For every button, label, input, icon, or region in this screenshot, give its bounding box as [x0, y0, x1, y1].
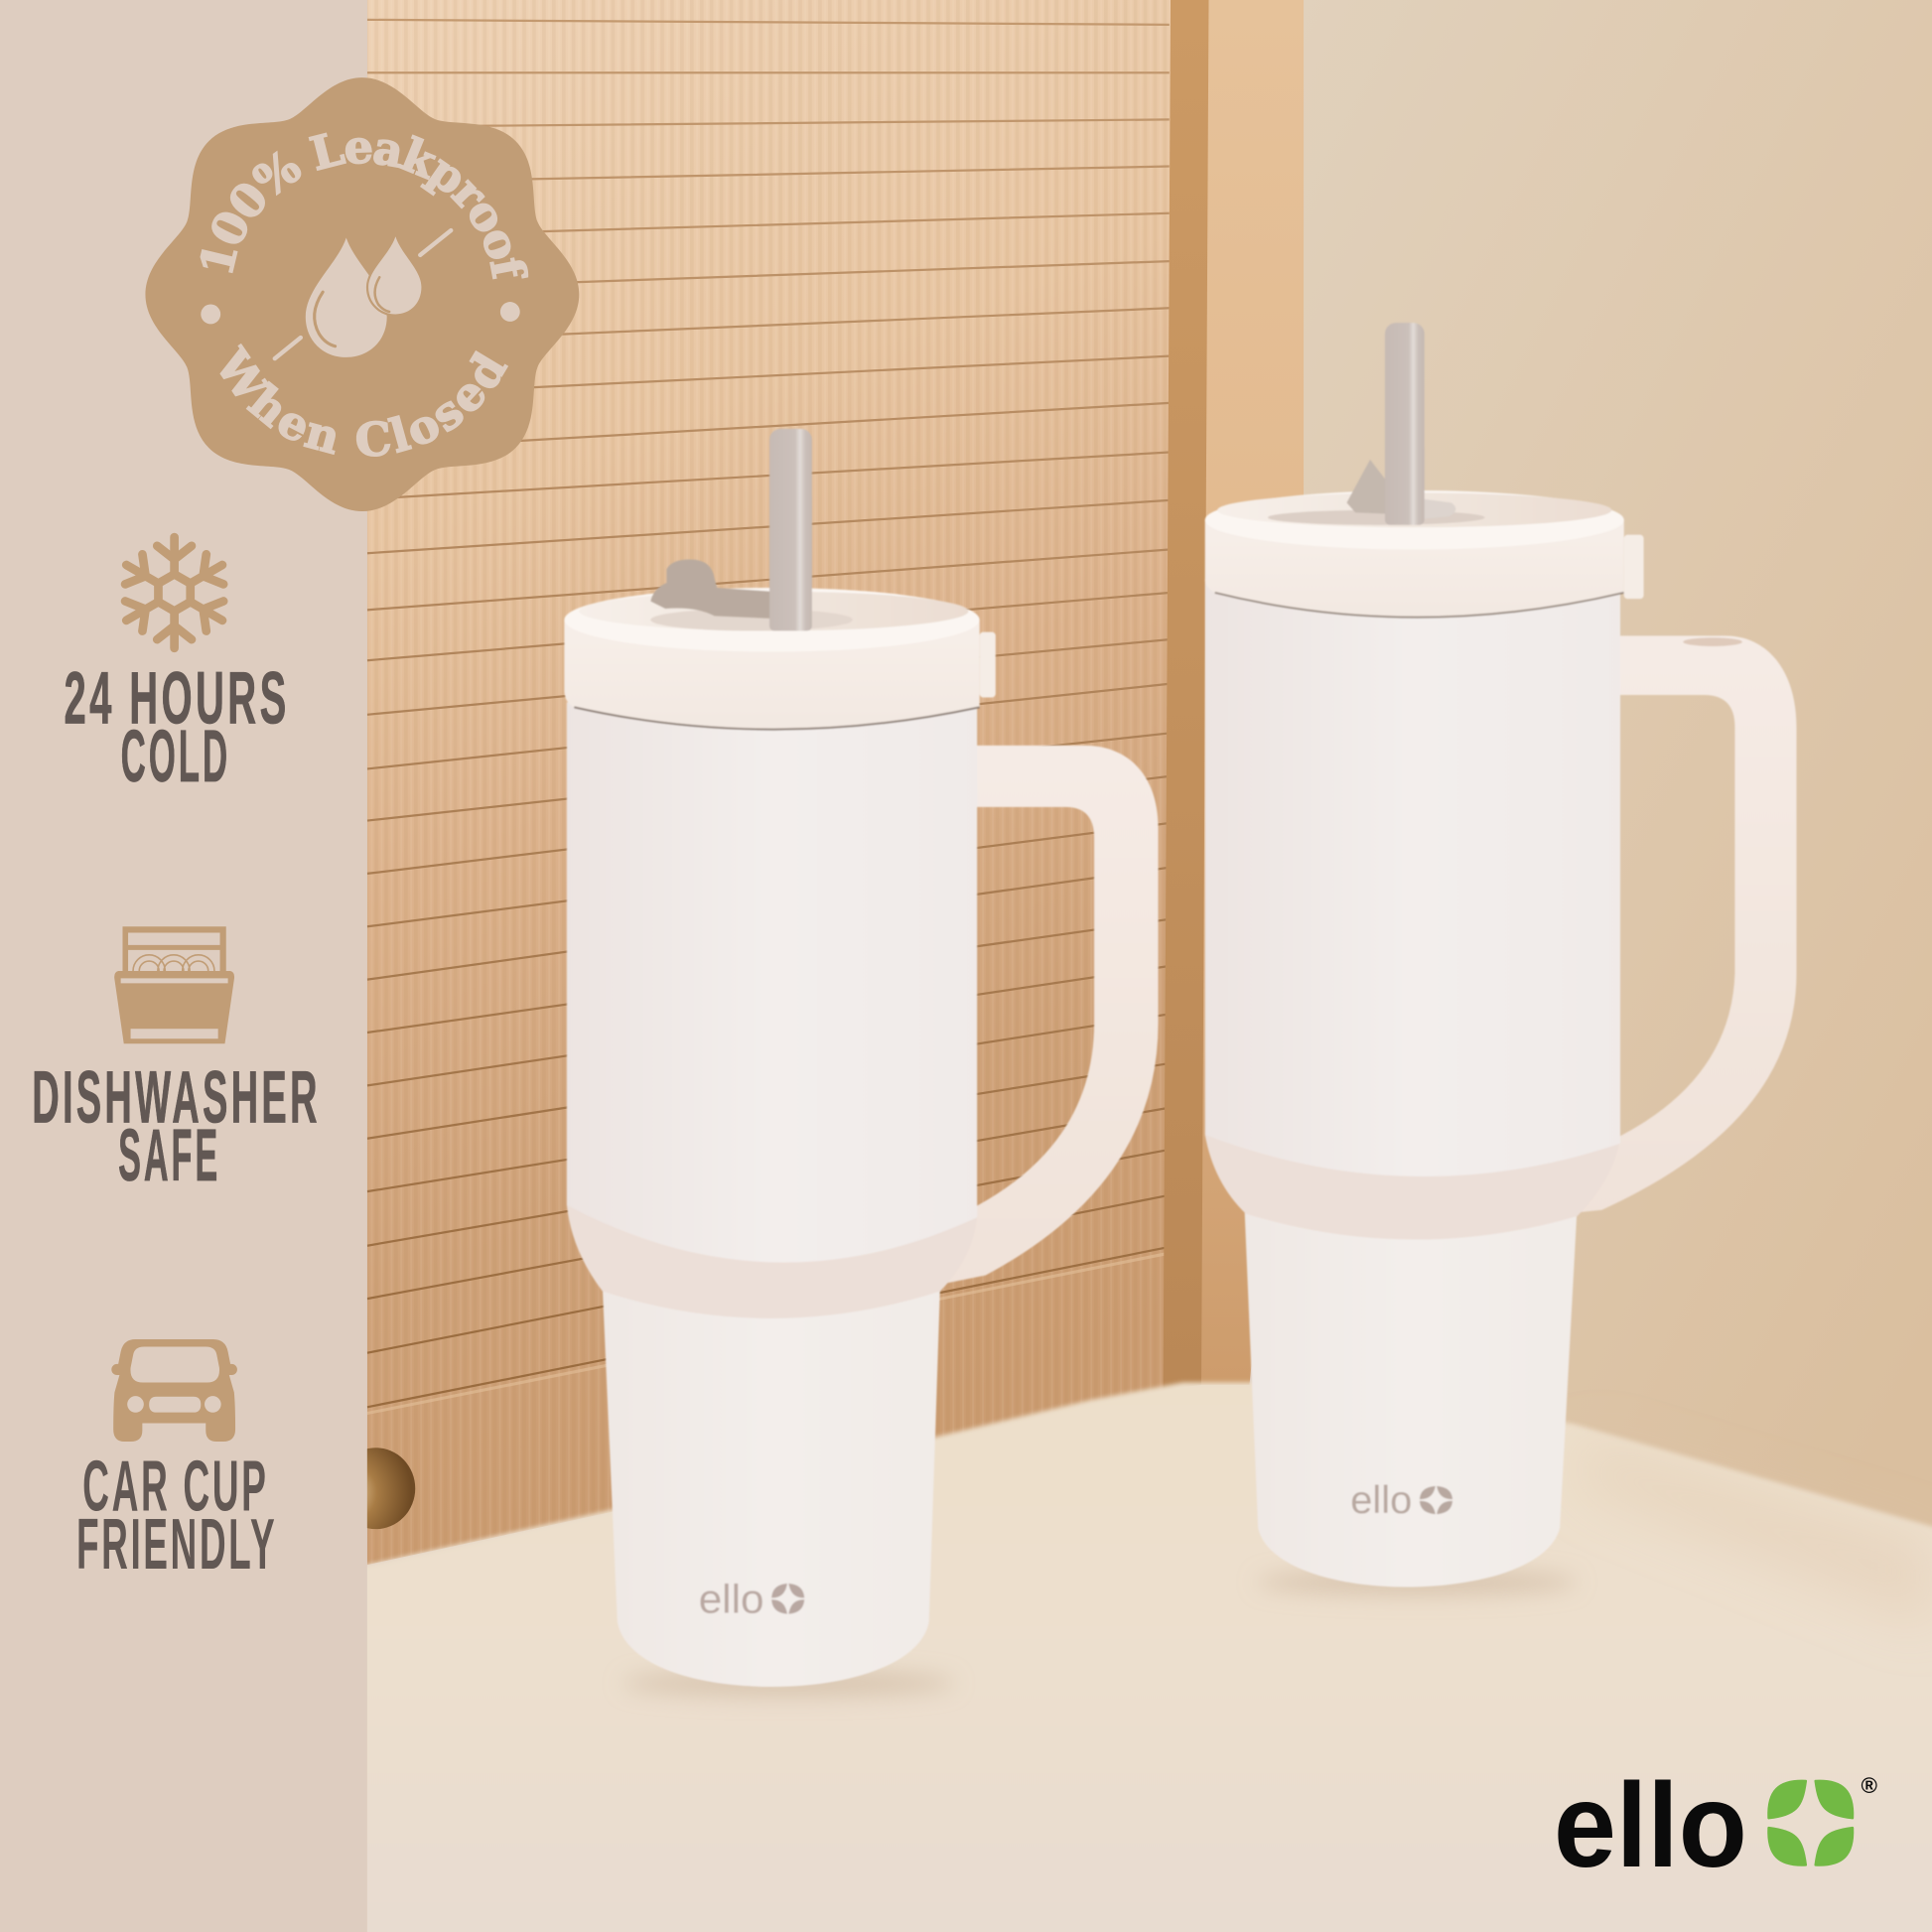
icon: car [111, 1339, 237, 1442]
wood slatted panel [367, 0, 1176, 1565]
right tumbler [1205, 323, 1796, 1587]
lower body [603, 1288, 940, 1687]
mug logo: ello [1350, 1479, 1412, 1522]
feature: dishwasher safe [32, 926, 321, 1196]
mug logo: ello [699, 1577, 763, 1622]
lower body [1244, 1207, 1578, 1587]
lid side [564, 620, 980, 730]
badge: 100% leakproof [145, 77, 580, 511]
icon: water drops [275, 230, 451, 358]
mouthpiece [650, 559, 771, 619]
badge bottom text: When Closed [220, 344, 508, 457]
lid tab [980, 632, 996, 697]
badge top text: 100% Leakproof [201, 133, 528, 280]
silicone ring [1205, 1135, 1620, 1240]
silicone ring [567, 1205, 977, 1318]
left tumbler [564, 429, 1159, 1687]
feature: car cup friendly [76, 1339, 277, 1585]
lid tab [1624, 535, 1644, 599]
label: car cup: CAR CUP [82, 1448, 269, 1527]
lid top rim [1205, 490, 1624, 550]
icon: dishwasher [114, 926, 234, 1043]
registered mark: ® [1861, 1773, 1877, 1798]
lid disc [1268, 510, 1484, 525]
logo wordmark: ello [1554, 1758, 1747, 1892]
mouthpiece [1346, 460, 1386, 514]
feature: dishwasher safe: SAFE [118, 1114, 220, 1196]
logo leaves [1768, 1781, 1853, 1864]
upper body [1205, 579, 1620, 1176]
counter shadow near wall [1584, 1442, 1932, 1626]
counter surface [345, 1382, 1932, 1932]
brass knob [337, 1448, 415, 1529]
lid recess [1217, 492, 1611, 527]
handle [942, 746, 1159, 1284]
feature: 24 hours cold [65, 537, 290, 797]
handle top groove [1683, 637, 1742, 646]
wall [1294, 0, 1932, 1601]
label: friendly: FRIENDLY [76, 1505, 277, 1585]
upper body [567, 702, 977, 1263]
badge dots [201, 302, 520, 324]
mouthpiece right [1423, 499, 1455, 518]
lid top rim [564, 588, 980, 652]
badge scalloped shape [145, 77, 579, 511]
lid recess [579, 592, 968, 630]
lid side [1205, 520, 1624, 618]
lid seam [574, 707, 980, 730]
wood vertical post dark face [1164, 0, 1208, 1390]
straw [769, 429, 812, 632]
wood vertical post light face [1199, 0, 1304, 1385]
straw front [769, 492, 812, 630]
feature: 24 hours cold: COLD [121, 715, 230, 797]
sidebar panel [0, 0, 367, 1932]
mug logo [1350, 1479, 1451, 1522]
straw front [1385, 444, 1425, 525]
mug shadows [622, 1570, 1578, 1696]
straw [1385, 323, 1425, 526]
handle [1578, 635, 1796, 1212]
brand logo [1554, 1758, 1877, 1892]
mug logo [699, 1577, 803, 1622]
label: 24 hours: 24 HOURS [65, 657, 290, 740]
icon: snowflake [118, 537, 231, 648]
label: dishwasher: DISHWASHER [32, 1056, 321, 1139]
lid disc [650, 609, 853, 630]
lid seam [1215, 593, 1624, 618]
